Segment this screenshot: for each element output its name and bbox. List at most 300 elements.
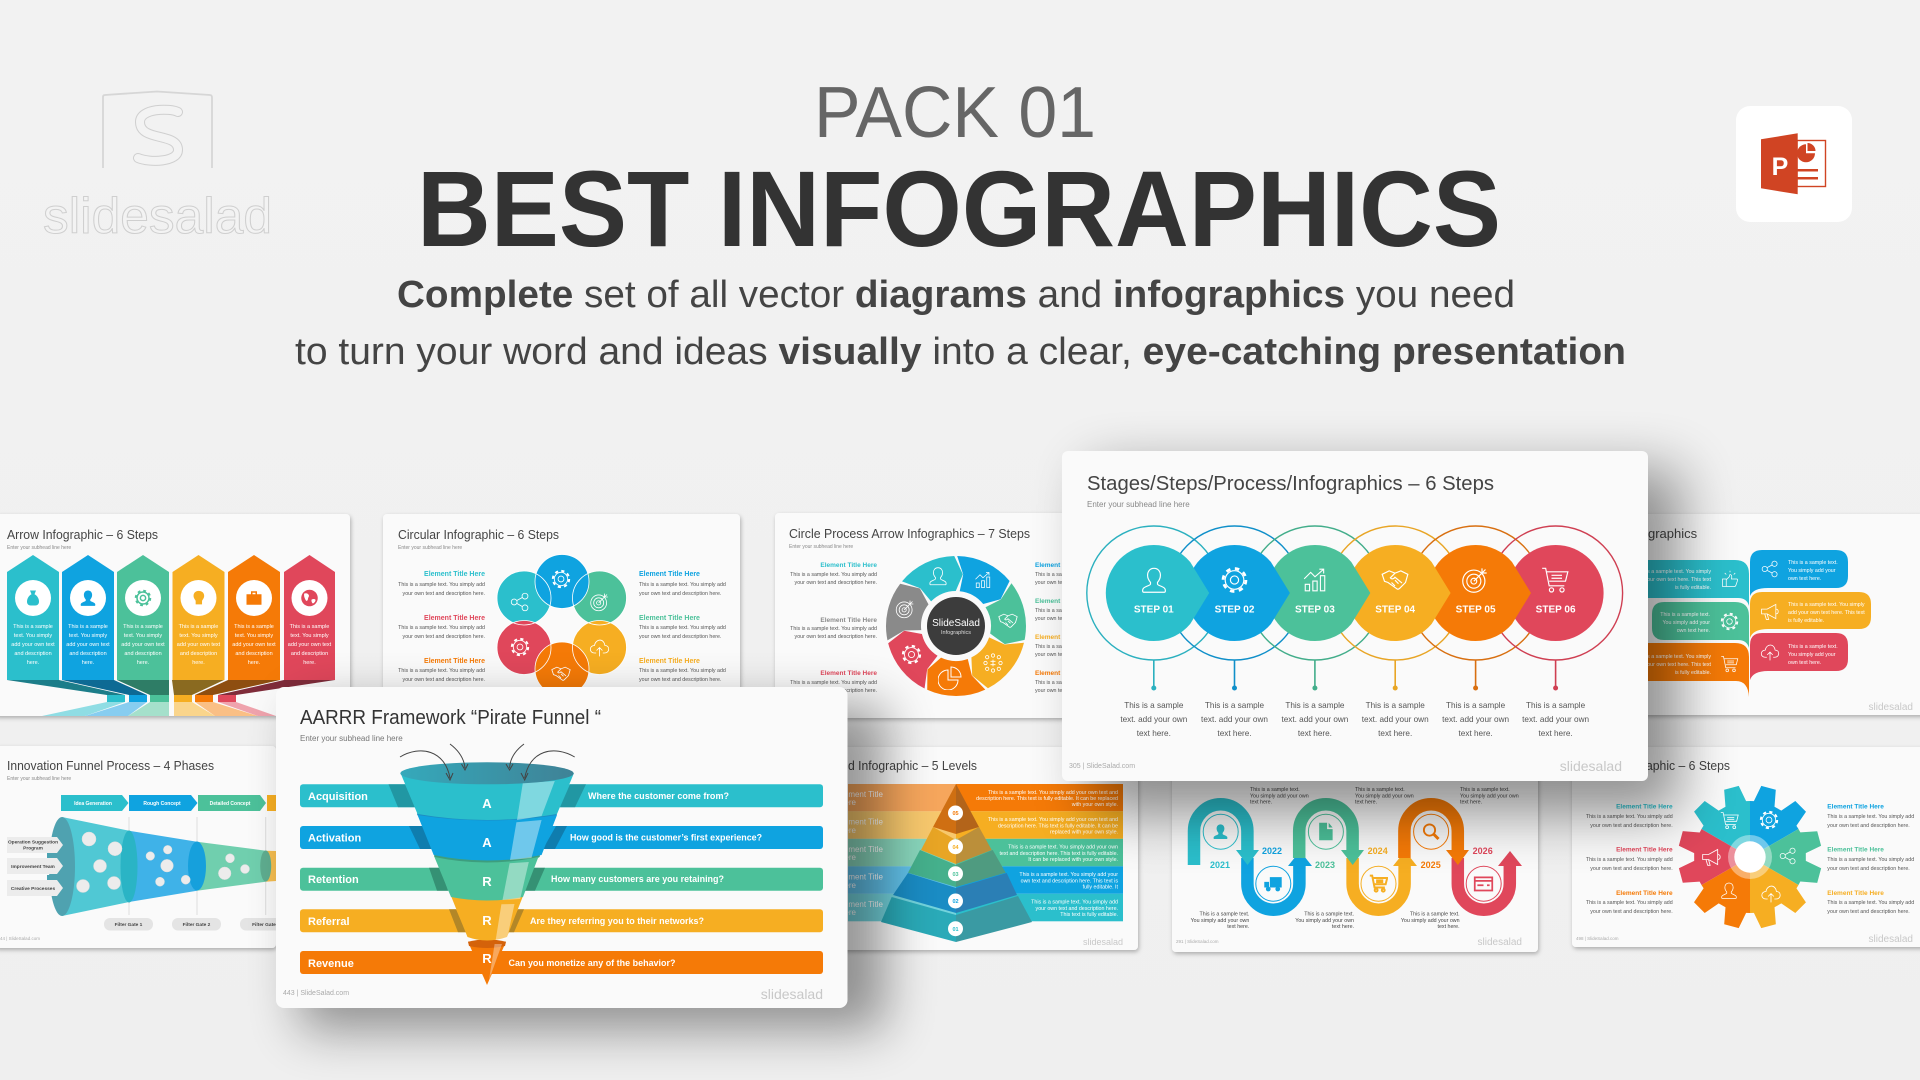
arrow 3: add your own text [121,642,165,648]
arrow 1: and description [14,651,52,657]
step 05: STEP 05 [1456,604,1496,616]
bubble right yellow [1750,592,1871,638]
band text right: It can be replaced with your own style. [1028,857,1118,863]
level badges [948,806,963,936]
arrow 2: here. [82,660,95,666]
lower notes: You simply add your own [1401,918,1460,924]
upper notes: This is a sample text. [1460,787,1510,793]
step captions: text. add your own [1522,715,1589,724]
right labels: your own text [1035,652,1067,658]
left labels: your own text and description here. [795,634,877,640]
arrow 4: add your own text [177,642,221,648]
right labels: Element Title Here [639,571,700,578]
step 02 [1186,545,1290,690]
step captions: text here. [1539,729,1573,738]
step captions: text here. [1378,729,1412,738]
arrow 3 [117,555,169,680]
inflow arrows [400,744,575,780]
bubble left teal: is fully editable. [1675,585,1711,591]
panel title: Stages/Steps/Process/Infographics – 6 Steps [1087,473,1494,495]
bubble right blue [1750,550,1848,596]
bubble left orange: your own text here. This text [1645,662,1712,668]
step captions: This is a sample [1205,701,1265,710]
bar: retention: How many customers are you retaining? [551,874,724,885]
level badges: 05 [952,811,959,817]
logo wordmark: slidesalad [43,188,272,244]
logo: slidesalad embossed [43,92,272,244]
right labels: This is a sample text. You simply add [1827,900,1914,906]
step captions: text. add your own [1362,715,1429,724]
blue loop [1247,851,1312,910]
phase arrows: Idea Generation [74,801,112,807]
arrow 5: here. [248,660,261,666]
upper notes: text here. [1250,800,1272,806]
icon: powerpoint: P [1772,153,1788,181]
band text right: This is a sample text. You simply add your own text and [988,790,1118,796]
upper notes: This is a sample text. [1250,787,1300,793]
right labels: Element Title [1035,562,1076,569]
yellow tier [451,891,523,940]
left labels: your own text and description here. [795,688,877,694]
bar: activation: How good is the customer’s first experience? [570,832,762,844]
step captions [1120,701,1589,738]
step captions: text here. [1459,729,1493,738]
funnel letters: R [482,913,492,928]
band text right: This is a sample text. You simply add your own [1008,844,1118,850]
teal tier [400,762,574,820]
left labels: Element Title Here [424,615,485,622]
step captions: This is a sample [1366,701,1425,710]
arrow 4: text. You simply [179,633,218,639]
arrow 3: This is a sample [123,624,163,630]
panel: circular infographic [383,514,740,716]
lower notes: text here. [1438,924,1460,930]
arrow 5: This is a sample [234,624,274,630]
level badges: 01 [952,927,959,933]
left labels: This is a sample text. You simply add [790,626,877,632]
band text right: description here. This text is fully editable. It can be [998,824,1118,830]
arrow 1: This is a sample [13,624,53,630]
input tags: Creative Processes [11,886,55,892]
bar: acquisition: Acquisition [308,791,368,803]
arrow 6: here. [303,660,316,666]
subhead: Enter your subhead line here [7,776,71,782]
band text right: replaced with your own style. [1050,830,1118,836]
bar: revenue: Revenue [308,958,354,970]
arrow 5: add your own text [232,642,276,648]
logo mark [103,92,212,168]
lower notes: You simply add your own [1191,918,1249,924]
lower notes [1191,912,1460,930]
right labels: your own text and description here. [1827,823,1910,829]
panel title: graphics [1648,526,1698,541]
bubble right blue: own text here. [1788,576,1821,582]
left labels: your own text and description here. [403,677,485,683]
panel title: aphic – 6 Steps [1646,758,1730,773]
left labels: This is a sample text. You simply add [398,668,485,674]
green tier [434,849,540,900]
upper notes: This is a sample text. [1355,787,1405,793]
step captions: This is a sample [1124,701,1184,710]
step captions: This is a sample [1285,701,1345,710]
right labels: This is a sample text. You simply add [1827,857,1914,863]
bar: referral: Referral [308,916,350,928]
left labels: This is a sample text. You simply add [790,572,877,578]
arrow 4: here. [192,660,205,666]
input tags: Operation Suggestion [8,840,58,846]
upper notes [1250,787,1519,806]
year labels: 2022 [1262,846,1282,856]
panel: bubble infographic [1640,514,1920,715]
subhead: Enter your subhead line here [1087,500,1190,509]
footer: 291 | SlideSalad.com [1176,939,1219,944]
bubble left green: This is a sample text. [1660,612,1710,618]
left labels: This is a sample text. You simply add [398,582,485,588]
bubble left teal: is a sample text. You simply [1646,569,1711,575]
step 06 [1508,545,1604,690]
bar: referral [300,909,823,932]
bar: activation: Activation [308,832,361,844]
step 04 [1347,545,1451,690]
funnel letters: R [482,951,492,966]
right labels: This is a sample text. You simply add [639,625,726,631]
right labels: Element Title Here [639,658,700,665]
upper notes: text here. [1355,800,1377,806]
band labels left [837,790,884,917]
band labels left: Here [839,798,857,807]
arrow 2 [62,555,114,680]
year labels: 2025 [1421,860,1441,870]
right labels: This is a sample [1035,644,1073,650]
panel: timeline infographic [1172,760,1538,952]
band text right: own text and description here. This text is [1021,878,1118,884]
right labels: Element Title Here [639,615,700,622]
bar: retention: Retention [308,874,359,886]
band text right: This is a sample text. You simply add your own text and [988,817,1118,823]
red loop [1458,851,1522,910]
year labels: 2023 [1315,860,1335,870]
arrow 2: add your own text [66,642,110,648]
band text right: fully editable. It [1083,884,1119,890]
arrow 6: add your own text [288,642,332,648]
left labels: Element Title Here [424,571,485,578]
arrow 4 [172,555,224,680]
panel title: Circle Process Arrow Infographics – 7 Steps [789,526,1030,541]
bubble left orange: is a sample text. You simply [1646,654,1711,660]
subhead: Enter your subhead line here [789,544,853,550]
bubble left teal [1640,560,1749,606]
lower notes: This is a sample text. [1200,912,1249,918]
band labels left: Here [839,826,857,835]
year labels: 2021 [1210,860,1230,870]
milestone icons [1203,814,1501,901]
step captions: text. add your own [1120,715,1188,724]
subhead: Enter your subhead line here [398,545,462,551]
left labels: This is a sample text. You simply add [1586,814,1673,820]
arrow 2: and description [69,651,107,657]
outer rings [1087,526,1623,660]
upper notes: text here. [1460,800,1482,806]
yellow loop [1353,851,1417,910]
bar: referral: Are they referring you to their networks? [530,916,704,927]
funnel letters: A [482,796,492,811]
band text right: with your own style. [1072,802,1118,808]
panel: arrow infographic [0,514,350,716]
bubble right red [1750,633,1848,680]
bubble left green [1652,602,1749,648]
level badges: 04 [952,845,959,851]
heading: best infographics: BEST INFOGRAPHICS [417,148,1501,269]
arrow 1: text. You simply [14,633,52,639]
serpentine arrows [1194,804,1522,910]
subhead: Enter your subhead line here [300,734,403,743]
watermark: slidesalad [1560,758,1622,774]
subheading line 2: to turn your word and ideas visually into a clear, eye-catching presentation [295,331,1626,373]
panel: innovation funnel [0,746,289,948]
panel: pyramid infographic [837,747,1138,950]
left labels: Element Title Here [820,617,877,624]
arrow 3: here. [137,660,150,666]
arrow 6: and description [291,651,328,657]
year labels: 2026 [1473,846,1493,856]
panel: gear infographic [1572,747,1920,947]
panel title: Arrow Infographic – 6 Steps [7,527,158,542]
panel title: d Infographic – 5 Levels [848,758,977,773]
right labels: This is a sample text. You simply add [1827,814,1914,820]
step 06: STEP 06 [1536,604,1576,616]
right labels: your own text and description here. [1827,909,1910,915]
filter gates: Filter Gate 1 [115,922,143,928]
band labels left: Here [839,881,857,890]
footer: 443 | SlideSalad.com [283,990,349,997]
right labels: your own text and description here. [639,591,721,597]
watermark: slidesalad [1478,937,1522,948]
bubble right yellow: This is a sample text. You simply [1788,602,1865,608]
band labels left: Element Title [837,900,884,909]
band text right [976,790,1119,918]
right labels: your own text [1035,580,1067,586]
wheel [876,540,1044,712]
band labels left: Element Title [837,845,884,854]
bubble right red: You simply add your [1788,652,1836,658]
step 05 [1428,545,1531,690]
footer: 44 | SlideSalad.com [0,936,40,941]
step captions: text here. [1217,729,1252,738]
step 03: STEP 03 [1295,604,1335,616]
subhead: Enter your subhead line here [7,545,71,551]
left labels: your own text and description here. [795,580,877,586]
phase arrows [61,795,276,811]
step captions: text. add your own [1442,715,1509,724]
left labels: This is a sample text. You simply add [1586,900,1673,906]
icon: powerpoint [1736,106,1852,222]
step captions: This is a sample [1526,701,1586,710]
band labels left: Element Title [837,790,884,799]
shadow of steps panel [1090,470,1680,815]
right labels: This is a sample text. You simply add [639,582,726,588]
right labels: Element Title [1035,598,1076,605]
panel: aarrr pirate funnel [276,687,848,1008]
right labels: This is a sample text. You simply add [639,668,726,674]
year labels [1210,846,1493,870]
step captions: text here. [1298,729,1332,738]
filter gates: Filter Gate [252,922,276,928]
teal loop [1194,804,1259,865]
panel: stages steps process [1062,451,1648,781]
lower notes: text here. [1227,924,1249,930]
bubble left orange: is fully editable. [1675,670,1711,676]
bubble right red: own text here. [1788,660,1821,666]
bubble right red: This is a sample text. [1788,644,1838,650]
subheading line 1: Complete set of all vector diagrams and infographics you need [397,274,1515,316]
band text right: your own text and description here. [1036,906,1118,912]
left labels: Element Title Here [1616,804,1673,810]
band labels left: Element Title [837,872,884,882]
right labels [1035,562,1076,694]
step captions: text. add your own [1281,715,1349,724]
right labels: Element Title [1035,670,1076,677]
right labels: This is a sample [1035,572,1073,578]
panel title: AARRR Framework “Pirate Funnel “ [300,707,601,729]
phase arrows: Rough Concept [143,801,181,807]
bar: activation [300,826,823,849]
bubble right yellow: is fully editable. [1788,618,1824,624]
gear [1660,773,1840,941]
right labels: This is a sample [1035,680,1073,686]
bar: revenue [300,951,823,974]
band text right: This text is fully editable. [1060,912,1118,918]
input tags [7,837,63,896]
left labels [1586,804,1673,915]
left labels: Element Title Here [424,658,485,665]
arrow 1 [7,555,59,680]
lower notes: This is a sample text. [1410,912,1460,918]
funnel letters [482,796,492,966]
panel title: Circular Infographic – 6 Steps [398,527,559,542]
filter gates: Filter Gate 2 [183,922,211,928]
step captions: text here. [1137,729,1171,738]
right labels [1827,804,1914,915]
left labels: your own text and description here. [1590,909,1673,915]
left labels: your own text and description here. [1590,866,1673,872]
arrow 2: text. You simply [69,633,107,639]
right labels: your own text [1035,688,1067,694]
orange tier [468,939,506,985]
watermark: slidesalad [761,986,823,1002]
band labels left: Element Title [837,818,884,826]
arrow 6 [284,555,335,680]
left labels: Element Title Here [820,562,877,569]
right labels: Element Title Here [1827,804,1884,810]
right labels: Element Title [1035,634,1076,641]
bar: revenue: Can you monetize any of the behavior? [508,958,676,969]
petal ring [497,554,626,696]
band text right: This is a sample text. You simply add your [1019,872,1118,878]
connector fans [7,680,335,716]
bar: retention [300,868,823,891]
gate lines [129,817,266,915]
filter gates [104,918,289,930]
step 02: STEP 02 [1215,604,1255,616]
arrow 5: text. You simply [235,633,273,639]
panel title: Innovation Funnel Process – 4 Phases [7,758,214,773]
bubble right blue: This is a sample text. [1788,560,1838,566]
bubble left orange [1640,643,1749,697]
step 03 [1267,545,1370,690]
heading: pack 01: PACK 01 [814,73,1096,153]
green loop [1299,804,1364,865]
left labels: your own text and description here. [1590,823,1673,829]
arrow 3: and description [124,651,162,657]
arrow 4: and description [180,651,217,657]
bubble left teal: your own text here. This text [1645,577,1712,583]
funnel letters: A [482,835,492,850]
right labels: your own text and description here. [639,677,721,683]
footer: 498 | SlideSalad.com [1576,936,1619,941]
left labels: Element Title Here [820,670,877,677]
watermark: slidesalad [1869,934,1913,945]
panel: circle process arrow [775,513,1076,718]
shadow of funnel panel [300,705,885,1030]
right labels [639,571,726,683]
left labels: Element Title Here [1616,890,1673,897]
upper notes: You simply add your own [1355,794,1414,800]
input tags: Improvement Team [11,864,55,870]
bands [848,784,1123,921]
lower notes: You simply add your own [1295,918,1354,924]
arrow 1: add your own text [11,642,55,648]
arrow 6: This is a sample [290,624,329,630]
step 01 [1106,545,1209,690]
right labels: your own text [1035,616,1067,622]
level badges: 03 [952,872,959,878]
band text right: This is a sample text. You simply add [1031,900,1118,906]
step 04: STEP 04 [1375,604,1416,616]
arrow 6: text. You simply [290,633,329,639]
left labels: your own text and description here. [403,634,485,640]
step 01: STEP 01 [1134,604,1174,616]
band text right: text and description here. This text is fully editable. [999,851,1118,857]
watermark: slidesalad [1869,702,1913,713]
arrow 2: This is a sample [68,624,108,630]
year labels: 2024 [1368,846,1388,856]
blue tier [417,804,557,860]
input tags: Program [23,846,43,852]
funnel letters: R [482,874,492,889]
arrow 5 [228,555,280,680]
left labels [790,562,877,694]
left labels: This is a sample text. You simply add [398,625,485,631]
right labels: your own text and description here. [639,634,721,640]
left labels: your own text and description here. [403,591,485,597]
upper notes: You simply add your own [1250,794,1309,800]
arrow 5: and description [235,651,273,657]
funnel [47,817,276,916]
band labels left: Here [839,908,857,917]
bubble right blue: You simply add your [1788,568,1836,574]
arrow 1: here. [27,660,40,666]
left labels: Element Title Here [1616,846,1673,854]
pyramid [881,784,1032,942]
bubble left green: You simply add your [1662,620,1710,626]
right labels: your own text and description here. [1827,866,1910,872]
bar: acquisition: Where the customer come from? [588,791,729,802]
left labels: This is a sample text. You simply add [790,680,877,686]
right labels: Element Title Here [1827,890,1884,897]
upper notes: You simply add your own [1460,794,1519,800]
bubble right yellow: add your own text here. This text [1788,610,1865,616]
right labels: This is a sample [1035,608,1073,614]
